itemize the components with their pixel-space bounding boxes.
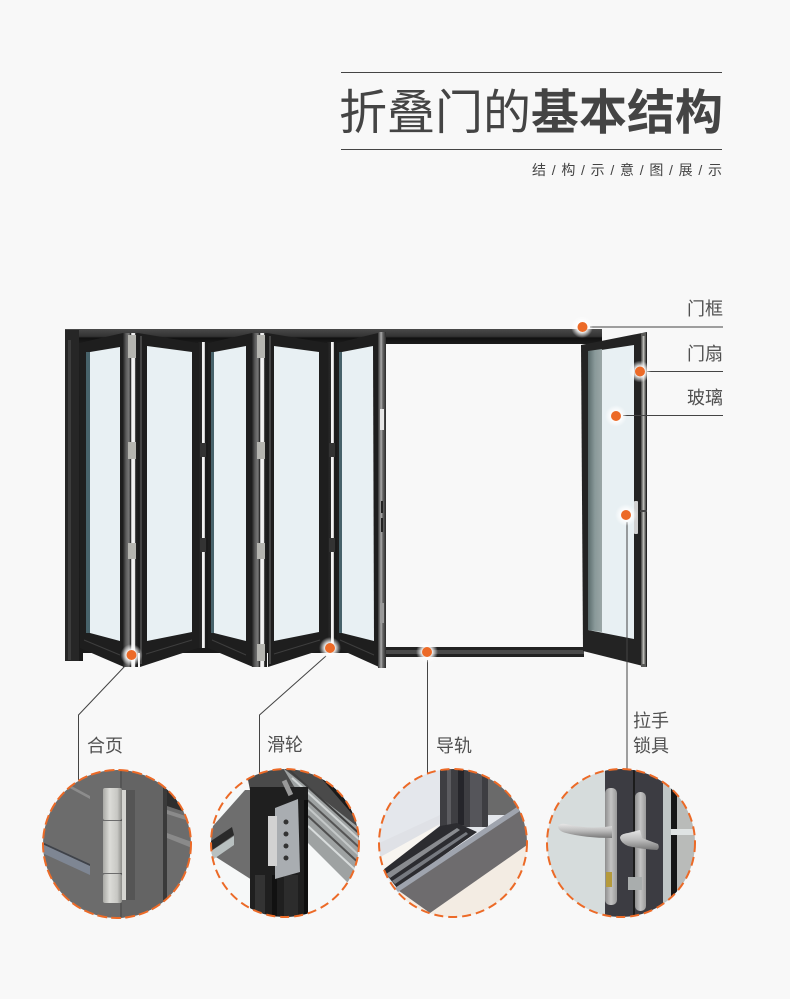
detail circle: handle lock xyxy=(546,768,696,918)
door frame top xyxy=(65,329,602,344)
marker: hinge xyxy=(120,644,142,666)
label: rail: 导轨 xyxy=(436,736,472,756)
panel 5 xyxy=(337,333,379,667)
hinge strip 3 xyxy=(252,333,267,667)
label: hinge: 合页 xyxy=(87,736,123,756)
label: handle lock xyxy=(633,711,669,756)
subtitle: 结 / 构 / 示 / 意 / 图 / 展 / 示 xyxy=(532,162,722,178)
detail circle: pulley xyxy=(210,768,360,918)
hinge strip 4 xyxy=(327,342,337,648)
leader lines xyxy=(78,327,723,780)
label: door frame: 门框 xyxy=(687,299,723,319)
marker: door leaf xyxy=(629,360,651,382)
marker: pulley xyxy=(319,637,341,659)
panel 2 xyxy=(138,333,198,667)
marker: handle lock xyxy=(615,504,637,526)
folding door illustration xyxy=(65,329,647,668)
door handle xyxy=(634,501,638,534)
label: pulley: 滑轮 xyxy=(267,735,303,755)
label: handle lock: 锁具 xyxy=(633,736,669,756)
detail circle: hinge xyxy=(40,765,195,925)
marker: rail xyxy=(416,641,438,663)
title block xyxy=(339,72,723,178)
bottom rail xyxy=(386,647,584,657)
label: door leaf: 门扇 xyxy=(687,344,723,364)
panel 1 xyxy=(79,333,124,667)
dark backing behind panels xyxy=(79,343,379,653)
door frame left post xyxy=(65,330,79,661)
hinge strip 1 xyxy=(123,333,138,667)
detail circle: rail xyxy=(378,768,528,918)
panel 5 edge with hardware xyxy=(378,332,386,668)
hinge strip 2 xyxy=(198,342,208,648)
open door leaf xyxy=(581,332,647,667)
marker: door frame xyxy=(571,316,593,338)
label: glass: 玻璃 xyxy=(687,388,723,408)
panel 3 xyxy=(208,333,253,667)
heading: 折叠门的基本结构 xyxy=(339,87,723,140)
panel 4 xyxy=(267,333,327,667)
label: handle lock: 拉手 xyxy=(633,711,669,731)
marker: glass xyxy=(605,405,627,427)
